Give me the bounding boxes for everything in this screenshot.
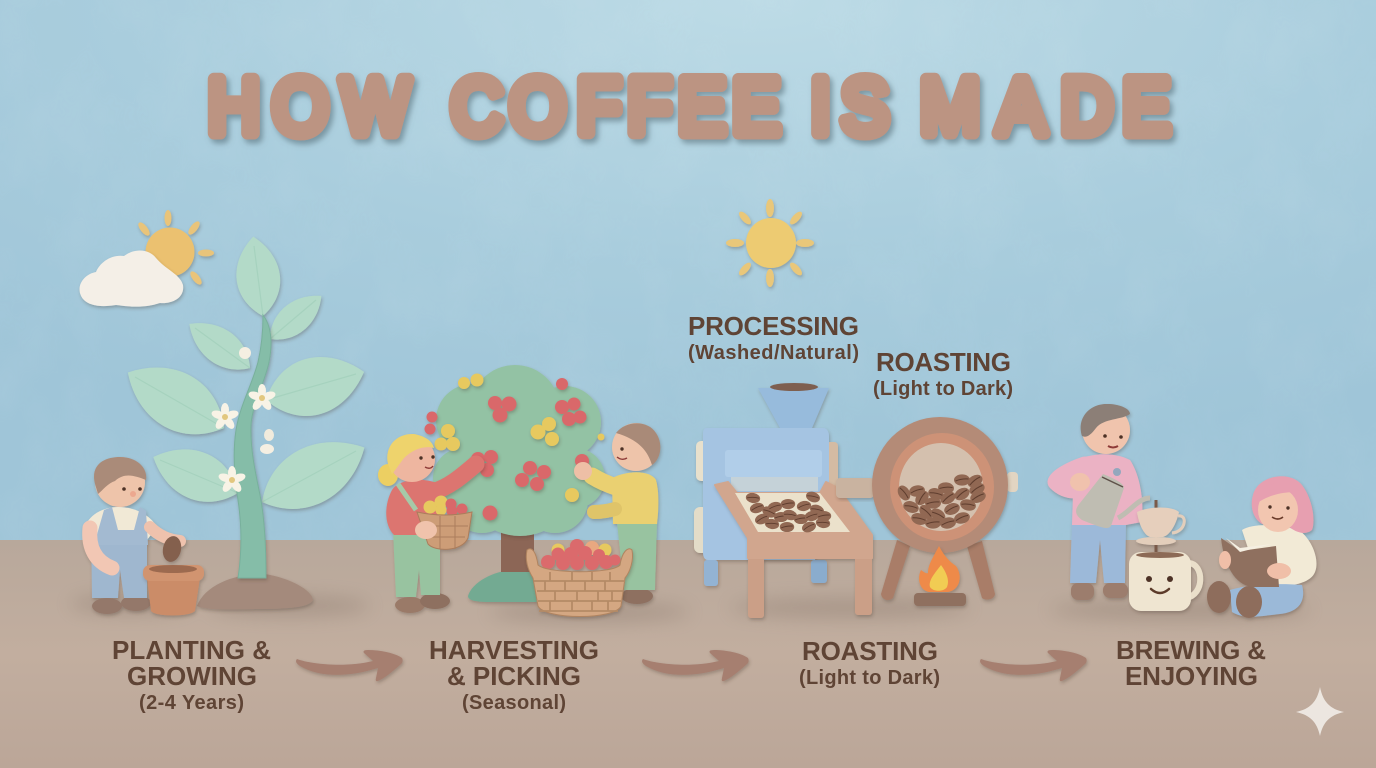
icon: cloud: [80, 250, 183, 307]
wall background: [0, 0, 1376, 541]
tree trunk: [501, 530, 534, 572]
shoes: [92, 598, 122, 614]
shoes: [395, 597, 425, 613]
machine legs: [704, 560, 718, 586]
label: brewing and enjoying: [1116, 635, 1266, 691]
trousers: [617, 522, 657, 590]
jeans: [1070, 520, 1126, 583]
head: [1082, 406, 1130, 454]
label: brewing and enjoying: BREWING &: [1116, 635, 1266, 665]
machine: drum roaster: [836, 417, 1018, 606]
roaster legs: [881, 540, 910, 600]
icon: terracotta pot: [143, 565, 204, 616]
pour-over dripper and mug: [1129, 500, 1200, 611]
label: roasting lower: ROASTING: [802, 636, 938, 666]
planting line two: GROWING: [127, 661, 257, 691]
figure: woman reading: [1207, 476, 1317, 618]
drum opening: [899, 443, 983, 531]
label: harvesting and picking: HARVESTING: [429, 635, 599, 665]
tree base: [468, 570, 537, 602]
wall texture: [0, 0, 1376, 541]
axle: [836, 478, 874, 498]
drum: [872, 417, 1008, 553]
gooseneck kettle: [1076, 468, 1150, 528]
basket weave: [534, 572, 625, 611]
harvesting season: (Seasonal): [462, 692, 566, 714]
shoes: [1071, 583, 1094, 600]
label: processing: PROCESSING: [688, 311, 859, 341]
large cherry basket: [526, 539, 633, 616]
sweater: [612, 472, 658, 524]
arms: [90, 528, 112, 568]
shirt: [84, 507, 157, 540]
icon: sun: [726, 199, 814, 287]
coffee bean: [160, 534, 184, 564]
leaf midribs: [135, 246, 356, 502]
label: roasting upper: [873, 347, 1013, 400]
tree canopy: [433, 365, 605, 536]
label: roasting upper: ROASTING: [876, 347, 1011, 377]
overalls: [91, 530, 147, 598]
label: harvesting and picking: [429, 635, 599, 714]
drying tray table: [715, 482, 872, 618]
inner chute: [725, 450, 822, 477]
dripper cone: [1137, 508, 1179, 537]
trousers: [393, 530, 440, 597]
dripper plate: [1136, 537, 1176, 545]
harvesting line two: & PICKING: [447, 661, 581, 691]
machine side panels: [696, 441, 708, 481]
cherries: [541, 539, 620, 570]
shoes: [1207, 581, 1231, 613]
small basket: [417, 496, 472, 549]
arrow: harvesting to roasting: [642, 650, 749, 681]
planting duration: (2-4 Years): [139, 692, 244, 714]
drying beans: [745, 490, 831, 534]
head: [389, 436, 435, 482]
machine: coffee washer: [694, 383, 838, 586]
label: processing: [688, 311, 859, 364]
roasting upper subtitle: (Light to Dark): [873, 378, 1013, 400]
title: HOW COFFEE IS MADE: [208, 62, 1170, 150]
hands: [1267, 563, 1291, 579]
raised arm: [432, 464, 476, 492]
figure: child planting: [84, 457, 184, 614]
machine body: [703, 428, 829, 560]
floor shadows: [70, 595, 1310, 622]
fire: [914, 546, 966, 606]
coral top: [386, 480, 445, 535]
trousers: [1230, 584, 1303, 617]
face: [1258, 488, 1298, 532]
head: [612, 423, 660, 471]
mug face: [1146, 576, 1152, 582]
processing subtitle: (Washed/Natural): [688, 342, 859, 364]
sweater: [1242, 525, 1317, 586]
apron strap: [398, 484, 416, 510]
icon: sparkle: [1296, 687, 1344, 736]
head: [95, 457, 145, 507]
drum ring: [890, 433, 994, 541]
plant leaves: [114, 234, 378, 527]
figure: man pouring coffee: [1056, 404, 1150, 600]
label: planting and growing: PLANTING &: [112, 635, 271, 665]
sweater: [1072, 454, 1142, 525]
plant stem: [234, 315, 271, 578]
arrow: roasting to brewing: [980, 650, 1087, 681]
ponytail: [378, 464, 398, 486]
coffee cherries: [424, 374, 604, 520]
book: [1221, 538, 1279, 587]
roasted beans: [895, 472, 987, 530]
hopper: [758, 388, 829, 428]
soil mound: [197, 574, 313, 610]
figure: girl picking cherries: [378, 434, 476, 613]
arrow: planting to harvesting: [296, 650, 403, 681]
scene: coffee tree: [424, 365, 605, 602]
arm: [1056, 465, 1085, 490]
roasting lower subtitle: (Light to Dark): [799, 667, 940, 689]
mug: [1186, 563, 1200, 598]
arms: [592, 476, 648, 492]
coffee stream: [1154, 500, 1158, 552]
table top: [715, 482, 872, 558]
shoe: [621, 588, 653, 604]
basket body: [526, 549, 633, 616]
label: roasting lower: [799, 636, 940, 689]
canvas: [735, 493, 850, 532]
label: planting and growing: [112, 635, 271, 714]
table surface: [0, 540, 1376, 768]
figure: boy picking cherries: [574, 423, 660, 604]
icon: sun behind cloud: [136, 210, 214, 286]
scene: coffee plant: [114, 234, 378, 610]
brewing line two: ENJOYING: [1125, 661, 1258, 691]
hair back: [1252, 476, 1314, 533]
table legs: [748, 552, 764, 618]
hand: [415, 521, 437, 539]
plant flowers: [210, 347, 277, 494]
